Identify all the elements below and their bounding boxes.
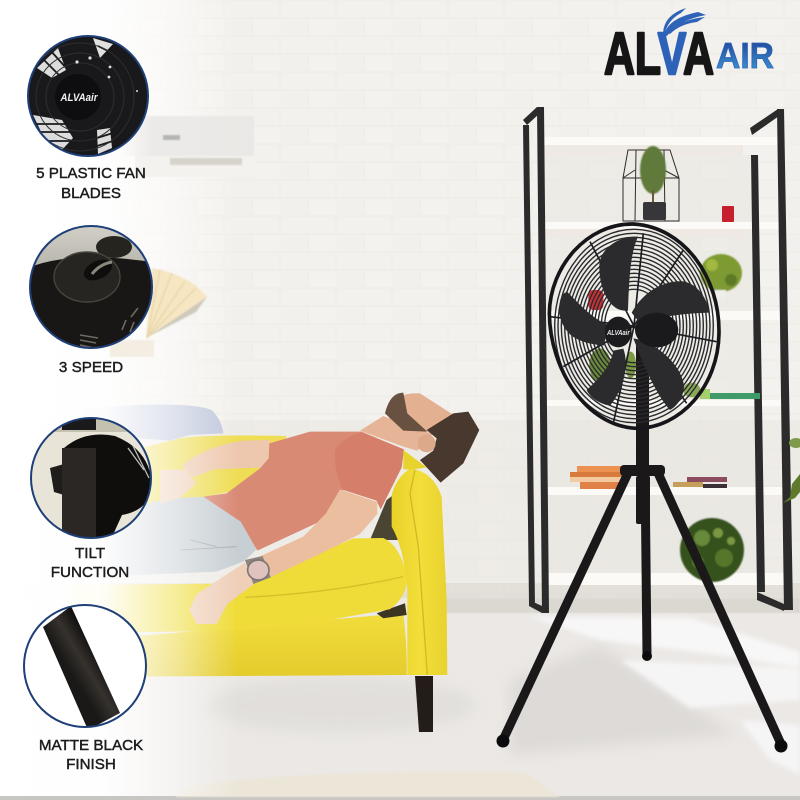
label: 3 speed: 3 SPEED (59, 359, 123, 376)
tripod legs (503, 470, 781, 744)
motor housing (635, 313, 678, 347)
armrest (392, 468, 447, 675)
sofa base (130, 613, 407, 677)
jeans (103, 497, 256, 577)
flat books (673, 477, 727, 488)
green ball plant (680, 518, 744, 582)
face (387, 393, 457, 433)
hub (605, 317, 632, 347)
grille spokes (550, 233, 717, 423)
left frame (523, 107, 549, 613)
circle photo: blades (26, 36, 148, 156)
label: matte black finish: FINISH (66, 756, 116, 773)
feature: plastic fan blades (26, 36, 148, 202)
outer rim (549, 224, 719, 428)
circle photo: blades: ALVAair (60, 92, 98, 104)
hub logo: ALVAair (606, 330, 631, 337)
caged potted plant (623, 146, 679, 221)
sofa back (140, 436, 287, 507)
near hand (189, 563, 254, 624)
seat cushion (70, 538, 407, 633)
plant at right edge (783, 438, 800, 503)
grille rings (555, 229, 713, 423)
stacked orange books (570, 466, 624, 489)
wristwatch (245, 556, 271, 584)
logo air: AIR (716, 35, 774, 76)
blades (559, 237, 710, 410)
beard (385, 393, 427, 432)
logo (604, 8, 774, 87)
shelf front shade (543, 145, 747, 238)
floor (0, 598, 800, 800)
fan cage and blades (549, 224, 719, 428)
circle photo: tilt joint (30, 418, 152, 538)
feature: matte black finish (24, 605, 146, 773)
pole and joint (620, 345, 665, 524)
feature: 3 speed (28, 224, 154, 376)
far arm (182, 440, 270, 477)
circle photo: speed knob (28, 224, 154, 350)
label: 5 plastic fan blades: 5 PLASTIC FAN (36, 165, 146, 182)
rug (175, 772, 560, 797)
green shrub plant (700, 254, 742, 298)
neck (360, 416, 433, 451)
far hand (160, 469, 196, 504)
logo swoosh (663, 8, 706, 36)
circle photo: black tube (43, 606, 145, 726)
pedestal fan (496, 224, 788, 752)
leg feet (496, 651, 788, 752)
left white fade overlay (0, 0, 250, 796)
seen through cage (588, 290, 700, 397)
yellow collar cushion (403, 450, 427, 469)
label: tilt function: FUNCTION (51, 564, 129, 581)
paper hand fan (110, 268, 207, 357)
shelves (543, 137, 788, 585)
label: 5 plastic fan blades: BLADES (61, 185, 121, 202)
shelving unit (523, 107, 793, 613)
label: tilt function: TILT (75, 545, 105, 562)
green books (700, 389, 760, 399)
right frame (750, 109, 793, 611)
shadow behind shoulder (370, 490, 400, 540)
raised knee jeans (83, 405, 223, 441)
feature: tilt function (30, 418, 152, 581)
yellow sofa and reclining man (70, 393, 479, 677)
air conditioner (120, 116, 254, 177)
label: matte black finish: MATTE BLACK (39, 737, 143, 754)
logo wordmark: ALVA (604, 21, 714, 87)
sofa leg (415, 676, 433, 732)
hair (420, 412, 479, 483)
near arm (259, 489, 377, 577)
brick wall background (0, 0, 800, 600)
shirt sleeve shading (335, 433, 404, 509)
ear (418, 434, 436, 452)
dark gap under cushion (377, 603, 407, 618)
red cup (722, 206, 734, 222)
salmon shirt (203, 432, 404, 551)
